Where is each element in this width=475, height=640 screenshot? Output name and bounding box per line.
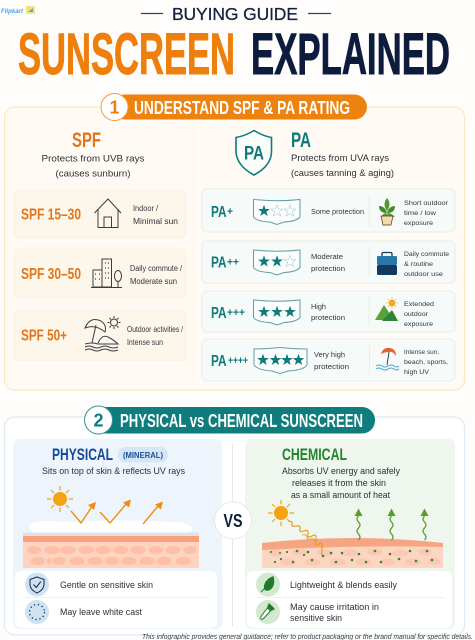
PA row: PA++++: Very high [314,350,345,359]
PA row: PA++++: protection [314,362,349,371]
badge: VS [214,502,252,539]
SPF card: 30-50: SPF 30–50 [21,266,81,283]
PA row: PA++++: beach, sports, [404,359,448,366]
PA row: PA++: PA [211,254,227,272]
logo: Flipkart: Flipkart [1,8,24,15]
panel: chemical: CHEMICAL [282,445,347,464]
SPF card: 30-50: Daily commute / [130,264,183,273]
physical heading: PHYSICAL [52,445,113,464]
chemical benefits list: sensitive skin [290,613,342,624]
PA row: PA+++: High [311,302,326,311]
SPF card: 15-30: SPF 15–30 [21,206,81,224]
PA row: PA++: protection [311,264,345,273]
PA row: PA++++: high UV [404,369,429,376]
section 2 heading pill: PHYSICAL vs CHEMICAL SUNSCREEN [120,411,363,431]
chemical description: releases it from the skin [292,478,386,488]
chemical benefits list: May cause irritation in [290,602,379,613]
PA row: PA+++: PA [211,305,227,322]
physical heading: (MINERAL) [123,451,163,460]
section 1 heading pill: UNDERSTAND SPF & PA RATING [134,98,350,118]
icon: dropper [256,600,280,624]
PA row: PA+++: exposure [404,321,433,328]
rating badge: two stars [254,250,300,275]
icon: leaf [256,572,280,596]
logo: Flipkart [1,6,35,15]
chemical benefits list: Lightweight & blends easily [290,580,397,591]
rating badge: one star [254,200,300,224]
PA row: PA+++: protection [311,313,345,322]
PA row: PA++: outdoor use [404,271,443,278]
section 1 heading pill [101,94,367,120]
SPF heading: (causes sunburn) [56,168,130,180]
panel: physical [13,439,222,629]
PA row: PA+++: Extended [404,301,434,308]
PA heading [291,129,394,179]
SPF heading: SPF [72,129,101,152]
icon: sun [47,486,73,512]
panel: chemical [245,439,455,629]
PA row: PA+ [202,189,455,232]
icon: orange beach umbrella [376,348,399,370]
icon: house [94,199,121,228]
icon: PA shield [236,130,272,175]
PA row: PA+++: +++ [227,307,245,319]
arrow: wavy UV ray absorbed into skin [288,521,322,554]
section 2 heading pill [84,406,375,434]
PA row: PA+: exposure [404,220,433,227]
chemical benefits list [247,571,452,628]
physical benefits list: Gentle on sensitive skin [60,580,153,591]
SPF card: 15-30 [14,190,186,238]
section 2 heading pill: 2 [93,410,104,430]
PA row: PA+: time / low [404,210,436,217]
rating badge: three stars [254,300,300,325]
SPF card: 15-30: Minimal sun [133,217,178,226]
SPF card: 50+: Intense sun [127,338,163,347]
SPF card: 50+ [14,310,186,361]
skin diagram with cream layer [23,520,199,568]
icon: city buildings [91,259,122,288]
icon: beach umbrella and sun [85,316,120,351]
SPF heading [42,129,145,180]
rating badge: four stars [254,348,307,374]
physical benefits list [15,571,217,628]
PA row: PA+++: outdoor [404,311,429,318]
PA row: PA++: Moderate [311,252,343,261]
PA row: PA++++: ++++ [228,355,248,367]
SPF heading: Protects from UVB rays [42,154,145,164]
SPF card: 15-30: Indoor / [133,204,159,213]
PA row: PA+++ [202,291,455,332]
section 1 heading pill: 1 [109,98,120,118]
icon: briefcase [377,252,397,275]
skin diagram with absorbed particles [262,538,443,568]
badge: VS: VS [224,511,242,531]
PA row: PA++++ [202,339,455,381]
PA row: PA+: PA [211,204,227,221]
icon: sun [268,500,294,526]
arrows: reflected UV rays [71,500,163,524]
icon: check shield [25,572,49,596]
PA row: PA++: ++ [227,256,239,268]
panel: physical vs chemical sunscreen [4,406,464,635]
chemical description [282,466,400,500]
icon: PA shield: PA [244,144,264,164]
PA row: PA+: Some protection [311,207,364,216]
PA row: PA++ [202,241,455,283]
icon: potted plant [379,198,395,225]
PA row: PA+: Short outdoor [404,200,449,207]
physical benefits list: May leave white cast [60,607,142,618]
SPF card: 50+: SPF 50+ [21,328,67,344]
PA heading: (causes tanning & aging) [291,168,394,179]
PA heading: PA [291,129,311,152]
arrows: heat released from skin [354,508,428,540]
panel: physical: Sits on top of skin & reflects UV rays [42,466,185,476]
PA row: PA++: Daily commute [404,251,449,258]
icon: mountains and sun [375,297,398,321]
chemical description: Absorbs UV energy and safely [282,466,400,476]
panel: understand SPF and PA rating [4,94,464,390]
SPF card: 30-50 [14,248,186,298]
PA row: PA++++: Intense sun, [404,349,439,356]
SPF card: 50+: Outdoor activities / [127,325,184,334]
PA row: PA++: & routine [404,261,433,268]
title: SUNSCREEN [18,22,235,87]
PA row: PA+: + [227,206,233,218]
PA heading: Protects from UVA rays [291,153,389,164]
SPF card: 30-50: Moderate sun [130,277,177,286]
eyebrow: buying guide: BUYING GUIDE [172,4,298,24]
PA row: PA++++: PA [211,353,227,370]
icon: dotted white cast circle [25,600,49,624]
chemical description: as a small amount of heat [291,490,390,500]
